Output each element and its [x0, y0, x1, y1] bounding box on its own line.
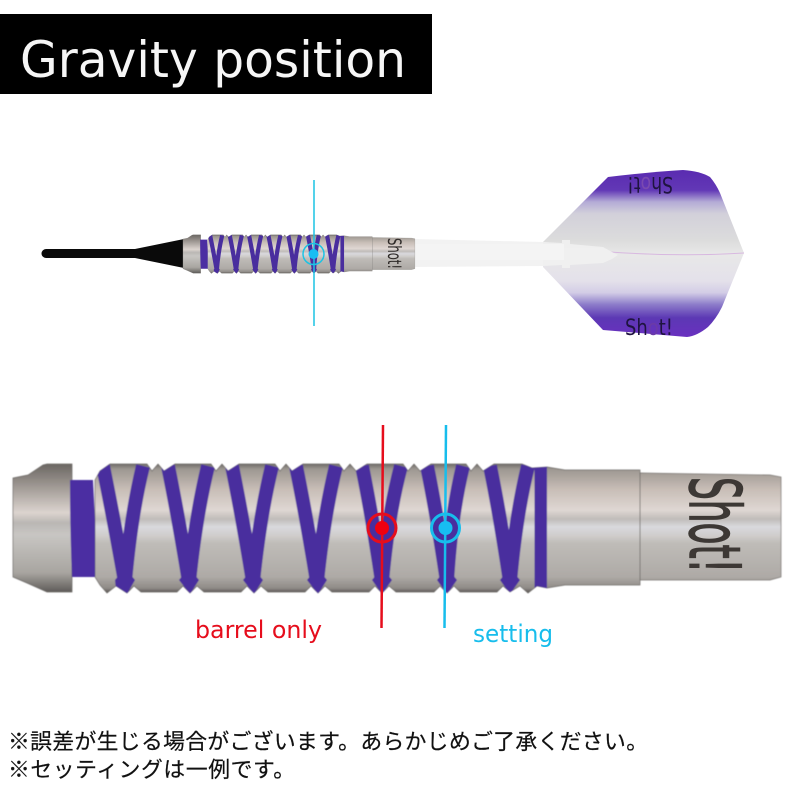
- small barrel: [183, 235, 415, 274]
- title banner: [0, 14, 432, 94]
- enlarged barrel illustration: [13, 464, 781, 594]
- enlarged barrel logo: Shot!: [673, 477, 755, 573]
- footnotes: ※誤差が生じる場合がございます。あらかじめご了承ください。: [8, 729, 648, 754]
- purple ring: [70, 480, 95, 577]
- label: barrel only: barrel only: [195, 616, 322, 644]
- small gravity marker: setting: [303, 180, 324, 326]
- dart flight: [543, 170, 744, 341]
- barrel grip body: [95, 464, 640, 593]
- blue marker: setting centre of gravity: [432, 425, 460, 628]
- dart flight: Shot!: [627, 171, 673, 196]
- barrel rear section: [640, 473, 781, 580]
- purple V grooves: [103, 466, 541, 594]
- small barrel logo: Shot!: [383, 238, 405, 269]
- footnotes: [8, 729, 648, 782]
- dart shaft: [414, 239, 618, 268]
- red marker: barrel only centre of gravity: [368, 425, 396, 628]
- barrel nose: [13, 464, 72, 592]
- small full dart illustration: [42, 170, 744, 341]
- label: setting: setting: [473, 620, 553, 648]
- dart flight: Shot!: [625, 316, 673, 341]
- title banner: Gravity position: [20, 31, 406, 89]
- dart tip: [42, 239, 184, 268]
- footnotes: ※セッティングは一例です。: [8, 757, 295, 782]
